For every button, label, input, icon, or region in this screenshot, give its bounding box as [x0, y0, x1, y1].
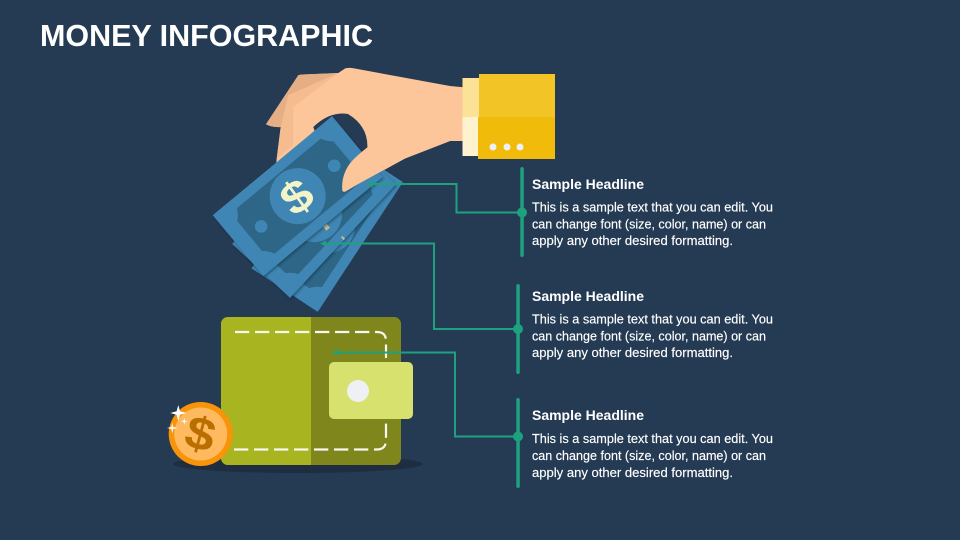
wallet clasp: [329, 362, 413, 419]
body text: can change font (size, color, name) or can: [532, 449, 766, 463]
icon: gold coin: $: [180, 405, 221, 463]
marker bar: [517, 167, 527, 257]
stitching: [234, 332, 386, 450]
title: MONEY INFOGRAPHIC: [40, 18, 373, 53]
hand: [266, 68, 463, 192]
icon: gold coin: [167, 402, 233, 466]
connector 3: [332, 350, 518, 436]
marker bar: [513, 398, 523, 488]
back banknote: [217, 104, 437, 346]
jacket sleeve: [478, 74, 555, 159]
body text: [532, 200, 773, 248]
body text: [532, 312, 773, 360]
body text: [532, 432, 773, 480]
clasp button: [347, 380, 369, 402]
panel: item 1: [517, 167, 773, 257]
connector 1: [367, 181, 522, 212]
finger mid shading: [277, 73, 338, 159]
headline: Sample Headline: [532, 407, 644, 423]
body text: can change font (size, color, name) or can: [532, 218, 766, 232]
middle banknote: [197, 95, 431, 333]
headline: Sample Headline: [532, 288, 644, 304]
body text: This is a sample text that you can edit. You: [532, 312, 773, 326]
wallet body: [221, 317, 401, 465]
shirt cuff: [462, 78, 480, 156]
body text: can change font (size, color, name) or can: [532, 330, 766, 344]
front banknote: $: [271, 168, 323, 226]
body text: apply any other desired formatting.: [532, 466, 733, 480]
icon: wallet: [173, 317, 423, 473]
finger dark shading: [266, 73, 338, 127]
body text: This is a sample text that you can edit. You: [532, 432, 773, 446]
body text: This is a sample text that you can edit. You: [532, 200, 773, 214]
connector 2: [320, 240, 518, 329]
marker bar: [513, 284, 523, 374]
panel: item 3: [513, 398, 773, 488]
thumb: [342, 135, 450, 192]
sparkles: [167, 405, 188, 434]
headline: Sample Headline: [532, 176, 644, 192]
icon: hand holding banknotes: [178, 68, 555, 346]
panel: item 2: [513, 284, 773, 374]
body text: apply any other desired formatting.: [532, 346, 733, 360]
wallet shadow: [173, 455, 423, 473]
peeking dollar fragments: [323, 224, 345, 240]
front banknote: [178, 81, 418, 311]
body text: apply any other desired formatting.: [532, 234, 733, 248]
